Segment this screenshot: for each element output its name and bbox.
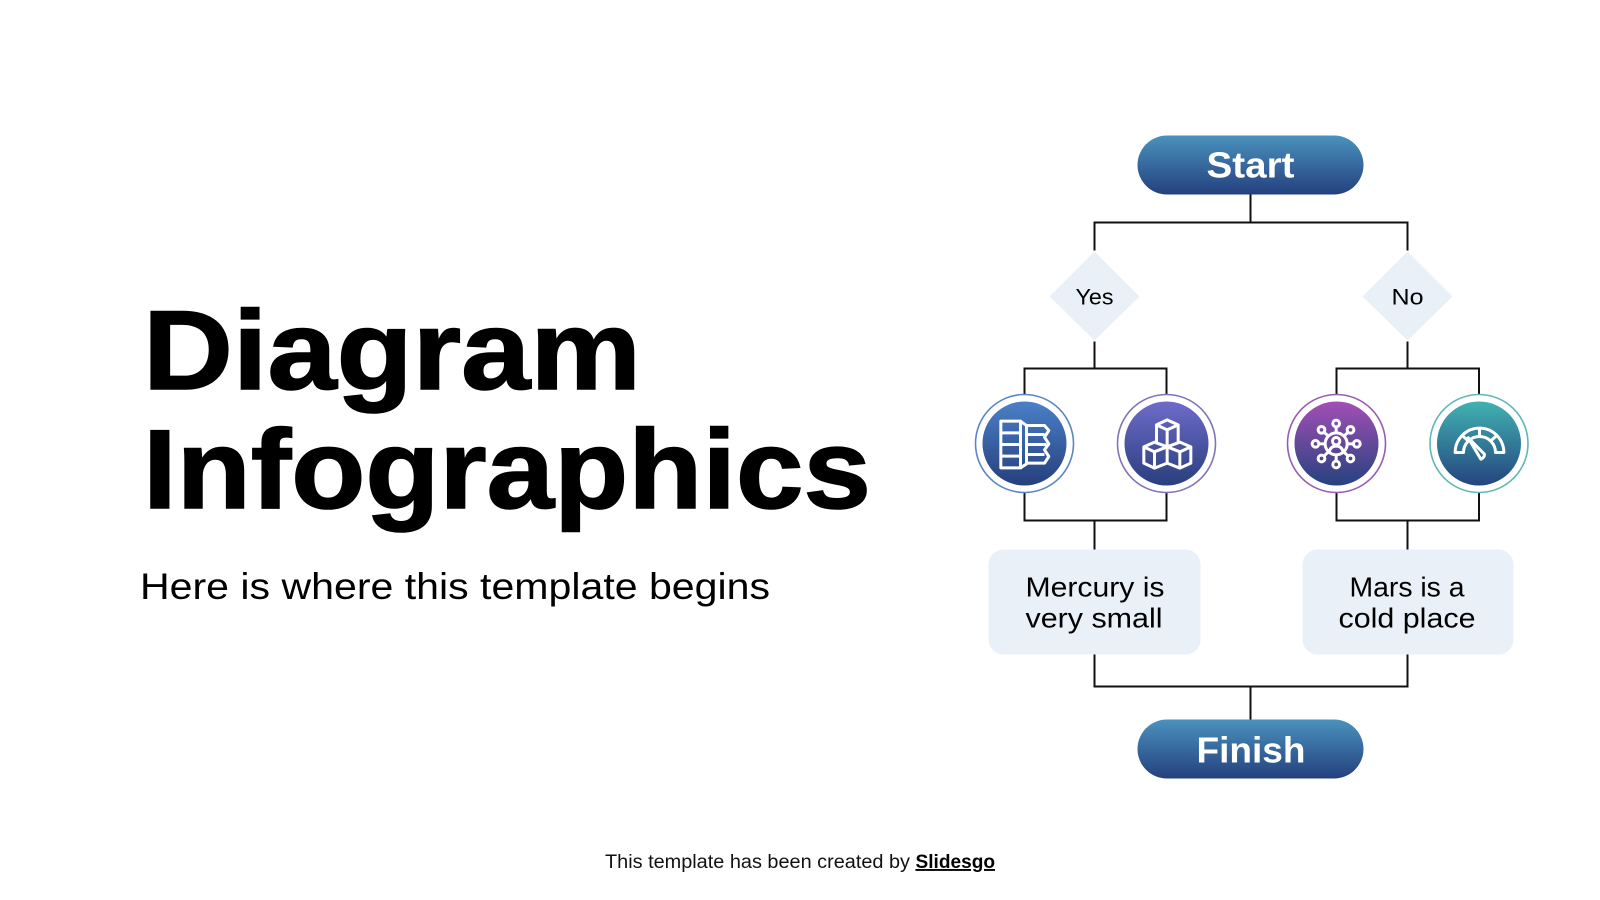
decision: yes: Yes [1076,284,1114,310]
title: Infographics [143,407,871,532]
flowchart [976,136,1528,778]
footer credit: This template has been created by [605,852,911,873]
icon: table circle [976,394,1074,492]
icon: network circle [1288,394,1386,492]
box: mars: cold place [1338,602,1476,634]
box: mars [1302,550,1514,654]
footer credit: Slidesgo [916,852,995,873]
box: mars: Mars is a [1350,572,1465,602]
flowchart connectors [1024,194,1479,720]
start pill [1138,136,1364,194]
box: mercury: Mercury is [1026,572,1164,602]
decision: no [1362,252,1452,340]
subtitle: Here is where this template begins [140,566,770,607]
decision: yes [1050,252,1140,340]
box: mercury: very small [1026,602,1162,634]
finish pill: Finish [1196,730,1306,770]
title [143,288,871,532]
icon: gauge circle [1430,394,1528,492]
icon: cubes circle [1118,394,1216,492]
decision: no: No [1392,284,1424,310]
start pill: Start [1206,144,1294,186]
finish pill [1138,720,1364,778]
title: Diagram [143,288,641,413]
box: mercury [988,550,1200,654]
